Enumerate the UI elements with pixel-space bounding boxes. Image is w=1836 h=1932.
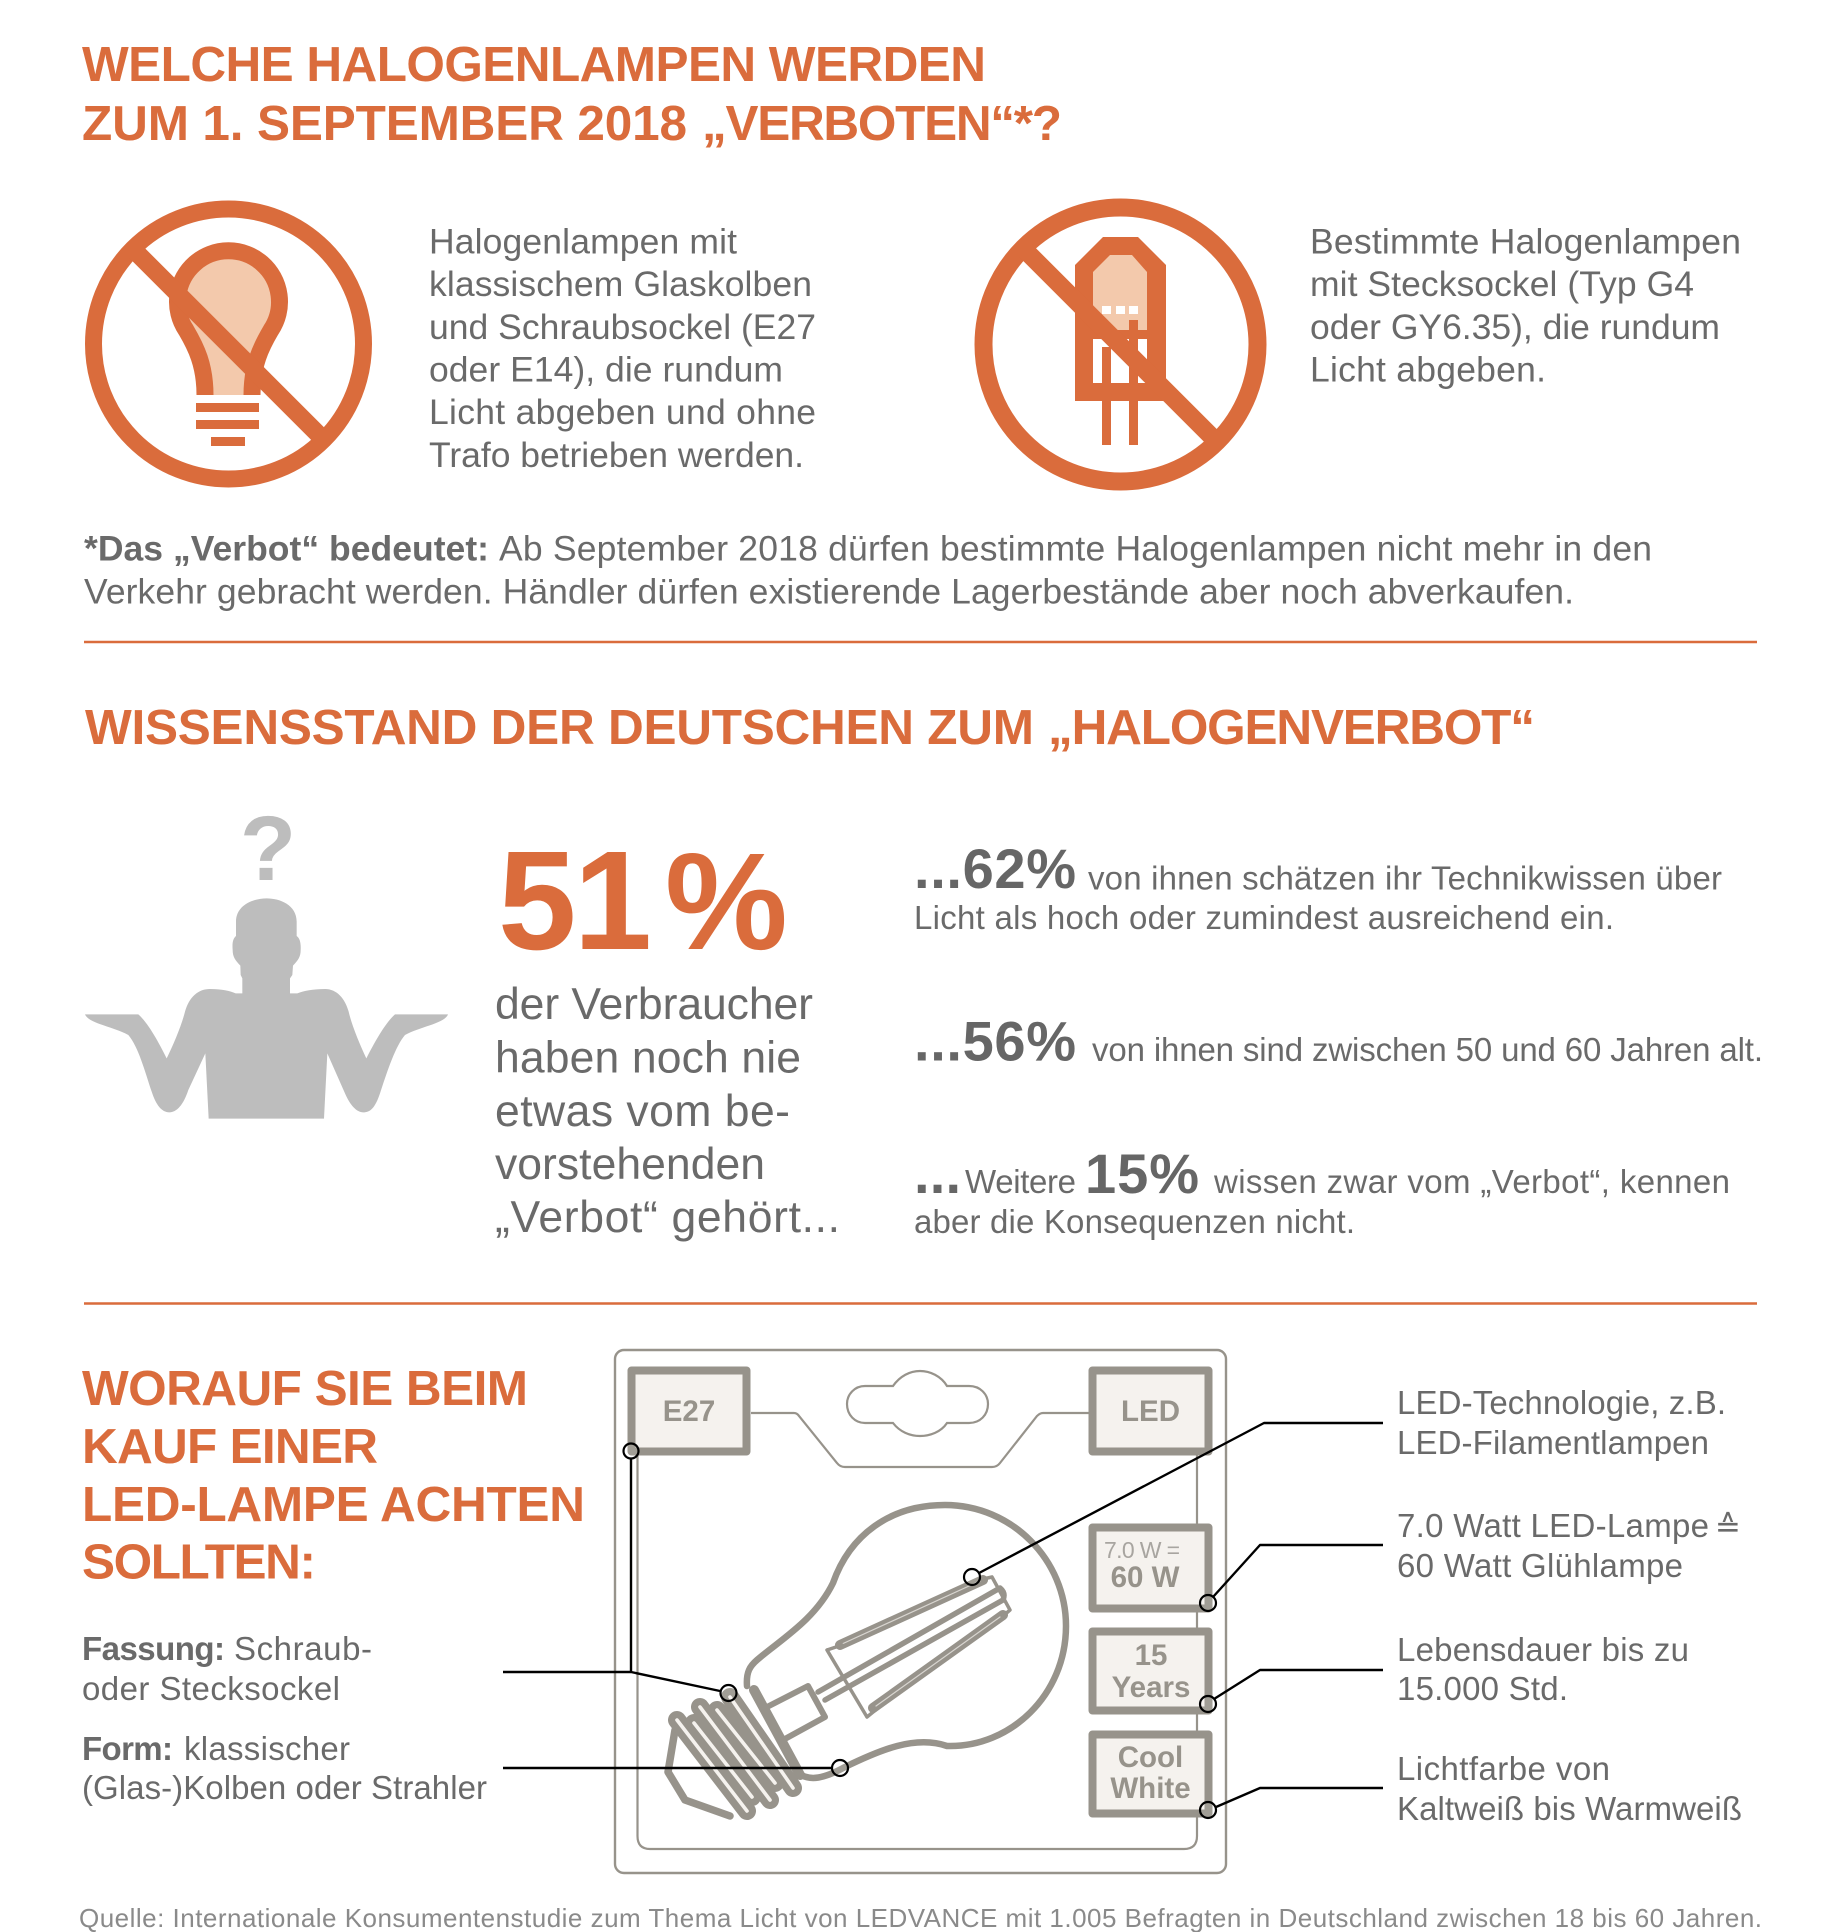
label box: wattage: 60 W [1111,1561,1180,1594]
label: watt equivalence [1397,1507,1741,1584]
label box: colour: Cool [1118,1741,1183,1774]
label: watt equivalence: 60 Watt Glühlampe [1397,1547,1683,1584]
text: consumers never heard: der Verbraucher [495,980,813,1029]
text: pin-base lamps: mit Stecksockel (Typ G4 [1310,264,1694,304]
text: pin-base lamps [1310,222,1741,390]
text: consumers never heard: vorstehenden [495,1140,765,1189]
big stat: 51%: 51 [498,821,652,979]
footnote: meaning of ban: Verkehr gebracht werden. Händler dürfen existierende Lagerbestände aber noch abverkaufen. [84,572,1574,612]
icon: shrugging person with question mark [85,798,448,1119]
label box: wattage: 7.0 W = [1104,1537,1180,1563]
big stat: 51% [498,821,788,979]
label: lifetime: 15.000 Std. [1397,1670,1568,1707]
label box: LED [1092,1370,1208,1452]
title [82,37,1062,151]
text: shape: Form: [82,1730,173,1767]
text: socket: Schraub- [234,1630,372,1667]
heading: what to look for: KAUF EINER [82,1419,378,1474]
text: consumers never heard: haben noch nie [495,1034,801,1082]
label: lifetime [1397,1631,1689,1707]
stat: 56%: ...56% [914,1010,1076,1072]
text: consumers never heard [495,980,840,1242]
label box: lifetime: 15 [1135,1639,1167,1672]
stat: 15%: 15% [1085,1142,1199,1205]
footnote: meaning of ban: *Das „Verbot“ bedeutet: [84,528,489,568]
heading: what to look for [82,1361,585,1590]
text: classic bulbs: Licht abgeben und ohne [429,392,816,432]
stat: 15%: aber die Konsequenzen nicht. [914,1203,1355,1240]
diagram: LED package [615,1350,1226,1873]
stat: 62%: von ihnen schätzen ihr Technikwissen über [1088,860,1722,896]
stat: 56% [914,1010,1763,1072]
stat: 15% [914,1142,1730,1240]
text: shape [82,1730,487,1806]
text: pin-base lamps: Licht abgeben. [1310,350,1546,390]
stat: 62%: Licht als hoch oder zumindest ausreichend ein. [914,899,1614,936]
label: light colour [1397,1750,1742,1827]
label: LED technology [1397,1384,1726,1461]
text: classic bulbs: klassischem Glaskolben [429,264,812,304]
text: classic bulbs: Halogenlampen mit [429,222,737,262]
text: shape: klassischer [184,1730,350,1767]
title: ZUM 1. SEPTEMBER 2018 [82,96,687,151]
label: lifetime: Lebensdauer bis zu [1397,1631,1689,1668]
heading: knowledge: WISSENSSTAND DER DEUTSCHEN ZUM [85,700,1034,755]
label: LED technology: LED-Filamentlampen [1397,1424,1709,1461]
footnote: meaning of ban: Ab September 2018 dürfen bestimmte Halogenlampen nicht mehr in den [499,528,1652,568]
label box: LED: LED [1121,1395,1180,1428]
label: watt equivalence: 7.0 Watt LED-Lampe [1397,1507,1709,1544]
stat: 62% [914,837,1722,936]
text: socket: Fassung: [82,1630,225,1667]
label box: lifetime: Years [1112,1671,1190,1704]
stat: 15%: ... [914,1142,961,1205]
icon: banned pin lamp [984,208,1258,482]
label box: wattage [1092,1528,1208,1608]
icon: shrugging person with question mark: ? [240,798,296,900]
label: LED technology: LED-Technologie, z.B. [1397,1384,1726,1421]
label: light colour: Lichtfarbe von [1397,1750,1610,1787]
heading: knowledge [85,700,1535,755]
heading: what to look for: LED-LAMPE ACHTEN [82,1477,585,1532]
label: watt equivalence: ≙ [1715,1509,1741,1545]
label box: E27 [632,1370,746,1452]
label box: E27: E27 [663,1395,715,1428]
text: socket [82,1630,372,1707]
text: classic bulbs: oder E14), die rundum [429,350,783,390]
stat: 56%: von ihnen sind zwischen 50 und 60 Jahren alt. [1092,1031,1763,1068]
label: light colour: Kaltweiß bis Warmweiß [1397,1790,1742,1827]
text: consumers never heard: „Verbot“ gehört... [495,1193,840,1242]
title: WELCHE HALOGENLAMPEN WERDEN [82,37,986,92]
filament bulb [668,1505,1066,1816]
package outline [615,1350,1226,1873]
text: pin-base lamps: oder GY6.35), die rundum [1310,307,1720,347]
callout lines and markers [503,1423,1383,1818]
text: socket: oder Stecksockel [82,1670,340,1707]
big stat: 51%: % [665,825,788,979]
text: shape: (Glas-)Kolben oder Strahler [82,1769,487,1806]
stat: 15%: Weitere [965,1163,1076,1200]
heading: what to look for: SOLLTEN: [82,1534,316,1590]
icon: banned light bulb [94,209,364,479]
heading: what to look for: WORAUF SIE BEIM [82,1361,528,1416]
text: classic bulbs: und Schraubsockel (E27 [429,307,816,347]
title: „VERBOTEN“*? [702,96,1062,151]
text: consumers never heard: etwas vom be- [495,1087,790,1136]
label box: colour [1092,1734,1208,1814]
text: pin-base lamps: Bestimmte Halogenlampen [1310,222,1741,262]
label box: lifetime [1092,1632,1208,1710]
stat: 15%: wissen zwar vom „Verbot“, kennen [1213,1163,1730,1200]
label box: colour: White [1110,1772,1191,1805]
text: classic bulbs: Trafo betrieben werden. [429,435,804,475]
footnote: meaning of ban [84,528,1652,612]
text: classic bulbs [429,222,816,475]
heading: knowledge: „HALOGENVERBOT“ [1048,700,1535,755]
stat: 62%: ...62% [914,837,1076,900]
